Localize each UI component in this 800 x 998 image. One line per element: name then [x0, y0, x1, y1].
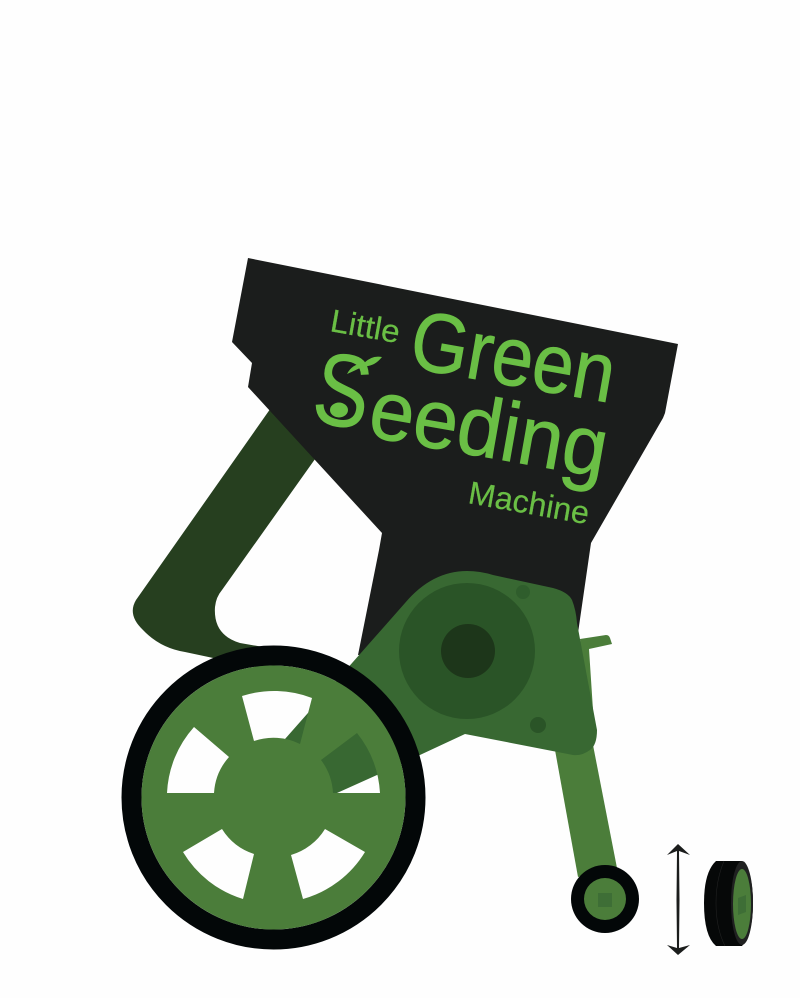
- side rim edge: [731, 861, 753, 945]
- side axle: [738, 895, 746, 915]
- small tyre: [571, 865, 639, 933]
- side tyre: [704, 861, 753, 946]
- logo word: Green: Green: [404, 292, 623, 420]
- logo word: eeding: eeding: [363, 361, 616, 495]
- small axle: [598, 893, 612, 907]
- side rim: [733, 869, 751, 939]
- wheel rim with cut-outs: [142, 666, 406, 930]
- tyre: [132, 656, 416, 940]
- gearbox disc: [399, 583, 535, 719]
- logo leaf: [347, 357, 382, 374]
- small front wheel: [571, 865, 639, 933]
- lower bolt: [530, 717, 546, 733]
- logo letter: S: S: [305, 329, 380, 453]
- double arrow: [667, 844, 690, 955]
- front leg: [555, 745, 617, 877]
- logo word: Machine: Machine: [466, 474, 592, 531]
- gearbox hub: [441, 624, 495, 678]
- gearbox body: [285, 571, 597, 800]
- logo seed: [330, 402, 348, 418]
- logo: [305, 292, 623, 531]
- side tread line: [716, 861, 725, 946]
- rear handle arm: [133, 395, 325, 668]
- hopper: [232, 258, 678, 655]
- upper bolt: [516, 585, 530, 599]
- small rim: [584, 878, 626, 920]
- side view wheel: [704, 861, 753, 946]
- logo word: Little: Little: [328, 302, 403, 350]
- large wheel: [132, 656, 416, 940]
- pedal handle: [580, 635, 612, 710]
